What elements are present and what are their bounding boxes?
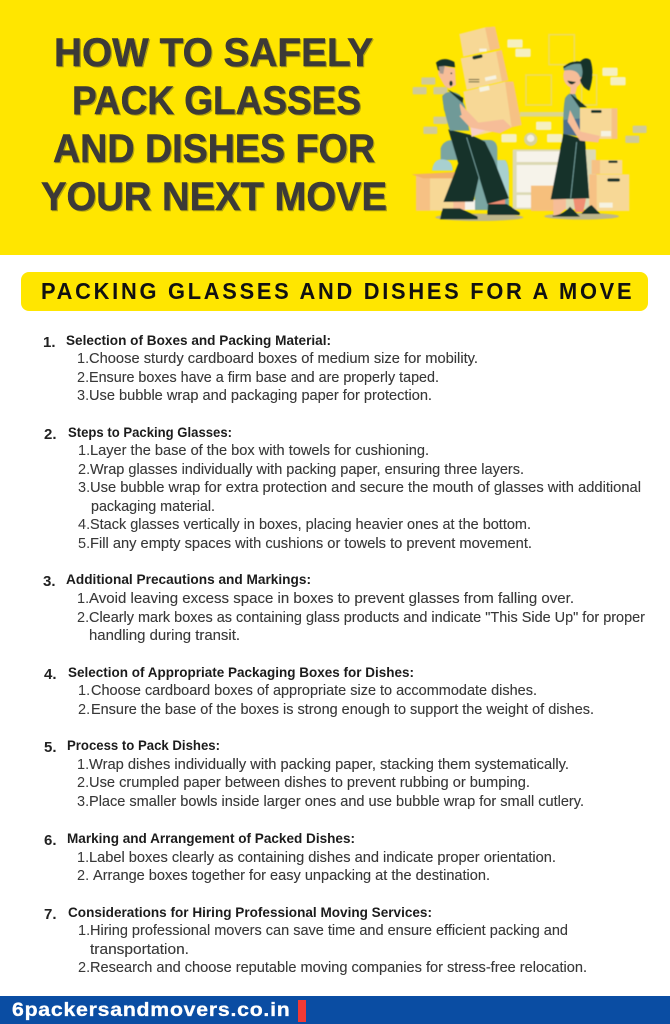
section 7: hiring professional movers: 2. <box>78 960 90 976</box>
section 5: process to pack dishes: Process to Pack Dishes: <box>67 737 220 753</box>
section 2: steps to packing glasses: Steps to Packing Glasses: <box>68 424 232 440</box>
section 7: hiring professional movers: Considerations for Hiring Professional Moving Services: <box>68 904 432 920</box>
title: HOW TO SAFELY <box>54 31 373 75</box>
title: AND DISHES FOR <box>53 127 375 171</box>
section 1: selection of boxes: Use bubble wrap and packaging paper for protection. <box>89 388 432 404</box>
section 2: steps to packing glasses: 2. <box>78 462 90 478</box>
section 6: marking and arrangement: 2. <box>77 868 89 884</box>
man's box stack <box>442 27 522 137</box>
section 2: steps to packing glasses: 2. <box>44 426 57 443</box>
section 1: selection of boxes: Choose sturdy cardboard boxes of medium size for mobility. <box>89 351 478 367</box>
section 7: hiring professional movers: Research and choose reputable moving companies for stress-free relocation. <box>90 960 587 976</box>
section 6: marking and arrangement: Marking and Arrangement of Packed Dishes: <box>67 830 355 846</box>
section 7: hiring professional movers <box>44 904 587 976</box>
section 7: hiring professional movers: 7. <box>44 906 57 923</box>
section 2: steps to packing glasses: packaging material. <box>91 499 215 515</box>
section 5: process to pack dishes: Place smaller bowls inside larger ones and use bubble wrap for small cutlery. <box>89 794 584 810</box>
section 2: steps to packing glasses: 5. <box>78 536 90 552</box>
website address: 6packersandmovers.co.in <box>12 1000 290 1021</box>
shadows <box>435 214 523 221</box>
section 4: packaging boxes for dishes: Ensure the base of the boxes is strong enough to support the weight of dishes. <box>91 702 594 718</box>
section 3: additional precautions: 2. <box>77 610 89 626</box>
section 4: packaging boxes for dishes: 4. <box>44 666 57 683</box>
section 2: steps to packing glasses: Stack glasses vertically in boxes, placing heavier ones at the bottom. <box>90 517 531 533</box>
title: HOW TO SAFELY <box>55 32 374 76</box>
furniture <box>432 112 596 211</box>
section 2: steps to packing glasses: Wrap glasses individually with packing paper, ensuring three layers. <box>90 462 524 478</box>
section 1: selection of boxes: 3. <box>77 388 89 404</box>
section 3: additional precautions: Avoid leaving excess space in boxes to prevent glasses from falling over. <box>89 591 574 607</box>
section 2: steps to packing glasses: Use bubble wrap for extra protection and secure the mouth of glasses with additional <box>90 480 641 496</box>
section 1: selection of boxes: Ensure boxes have a firm base and are properly taped. <box>89 370 439 386</box>
section 6: marking and arrangement: Label boxes clearly as containing dishes and indicate proper orientation. <box>89 850 556 866</box>
section 3: additional precautions: handling during transit. <box>89 628 240 644</box>
section 1: selection of boxes: Selection of Boxes and Packing Material: <box>66 332 331 348</box>
title: AND DISHES FOR <box>54 128 376 172</box>
section 1: selection of boxes: 1. <box>77 351 89 367</box>
section 3: additional precautions: 1. <box>77 591 89 607</box>
banner heading: PACKING GLASSES AND DISHES FOR A MOVE <box>41 277 632 304</box>
section 2: steps to packing glasses: 3. <box>78 480 90 496</box>
panel: yellow header <box>0 0 670 255</box>
section 5: process to pack dishes: 5. <box>44 739 57 756</box>
section 3: additional precautions: Clearly mark boxes as containing glass products and indicate "This Side Up" for proper <box>89 610 645 626</box>
title <box>41 31 388 220</box>
section 2: steps to packing glasses: Layer the base of the box with towels for cushioning. <box>90 443 429 459</box>
section 3: additional precautions: 3. <box>43 573 56 590</box>
title: PACK GLASSES <box>72 79 361 123</box>
section 5: process to pack dishes: Use crumpled paper between dishes to prevent rubbing or bumping. <box>89 775 530 791</box>
section 5: process to pack dishes: 3. <box>77 794 89 810</box>
section 6: marking and arrangement: 6. <box>44 832 57 849</box>
banner heading <box>21 272 648 311</box>
section 4: packaging boxes for dishes: Choose cardboard boxes of appropriate size to accommodate dishes. <box>91 683 537 699</box>
section 6: marking and arrangement: Arrange boxes together for easy unpacking at the destination. <box>93 868 490 884</box>
section 1: selection of boxes: 1. <box>43 334 56 351</box>
woman <box>551 58 617 217</box>
section 7: hiring professional movers: transportation. <box>90 942 189 958</box>
title: YOUR NEXT MOVE <box>42 176 388 220</box>
open box <box>412 172 458 211</box>
section 4: packaging boxes for dishes: 1. <box>78 683 90 699</box>
stacked boxes on right <box>589 160 629 211</box>
section 5: process to pack dishes: 2. <box>77 775 89 791</box>
section 5: process to pack dishes <box>44 737 584 810</box>
section 2: steps to packing glasses <box>44 424 641 552</box>
section 5: process to pack dishes: Wrap dishes individually with packing paper, stacking them systematically. <box>89 757 569 773</box>
section 2: steps to packing glasses: 4. <box>78 517 90 533</box>
section 4: packaging boxes for dishes: 2. <box>78 702 90 718</box>
section 6: marking and arrangement <box>44 830 556 884</box>
section 2: steps to packing glasses: 1. <box>78 443 90 459</box>
illustration: couple carrying moving boxes <box>412 27 647 221</box>
section 1: selection of boxes <box>43 332 478 404</box>
section 3: additional precautions: Additional Precautions and Markings: <box>66 571 311 587</box>
footer bar <box>0 996 670 1024</box>
title: YOUR NEXT MOVE <box>41 175 387 219</box>
section 2: steps to packing glasses: Fill any empty spaces with cushions or towels to prevent movement. <box>90 536 532 552</box>
section 5: process to pack dishes: 1. <box>77 757 89 773</box>
section 4: packaging boxes for dishes: Selection of Appropriate Packaging Boxes for Dishes: <box>68 664 414 680</box>
title: PACK GLASSES <box>73 80 362 124</box>
man <box>436 59 520 219</box>
red accent block <box>298 1000 306 1022</box>
section 1: selection of boxes: 2. <box>77 370 89 386</box>
section 6: marking and arrangement: 1. <box>77 850 89 866</box>
section 4: packaging boxes for dishes <box>44 664 594 718</box>
section 7: hiring professional movers: 1. <box>78 923 90 939</box>
section 3: additional precautions <box>43 571 645 644</box>
wall bricks and frames <box>413 35 647 143</box>
section 7: hiring professional movers: Hiring professional movers can save time and ensure efficient packing and <box>90 923 568 939</box>
